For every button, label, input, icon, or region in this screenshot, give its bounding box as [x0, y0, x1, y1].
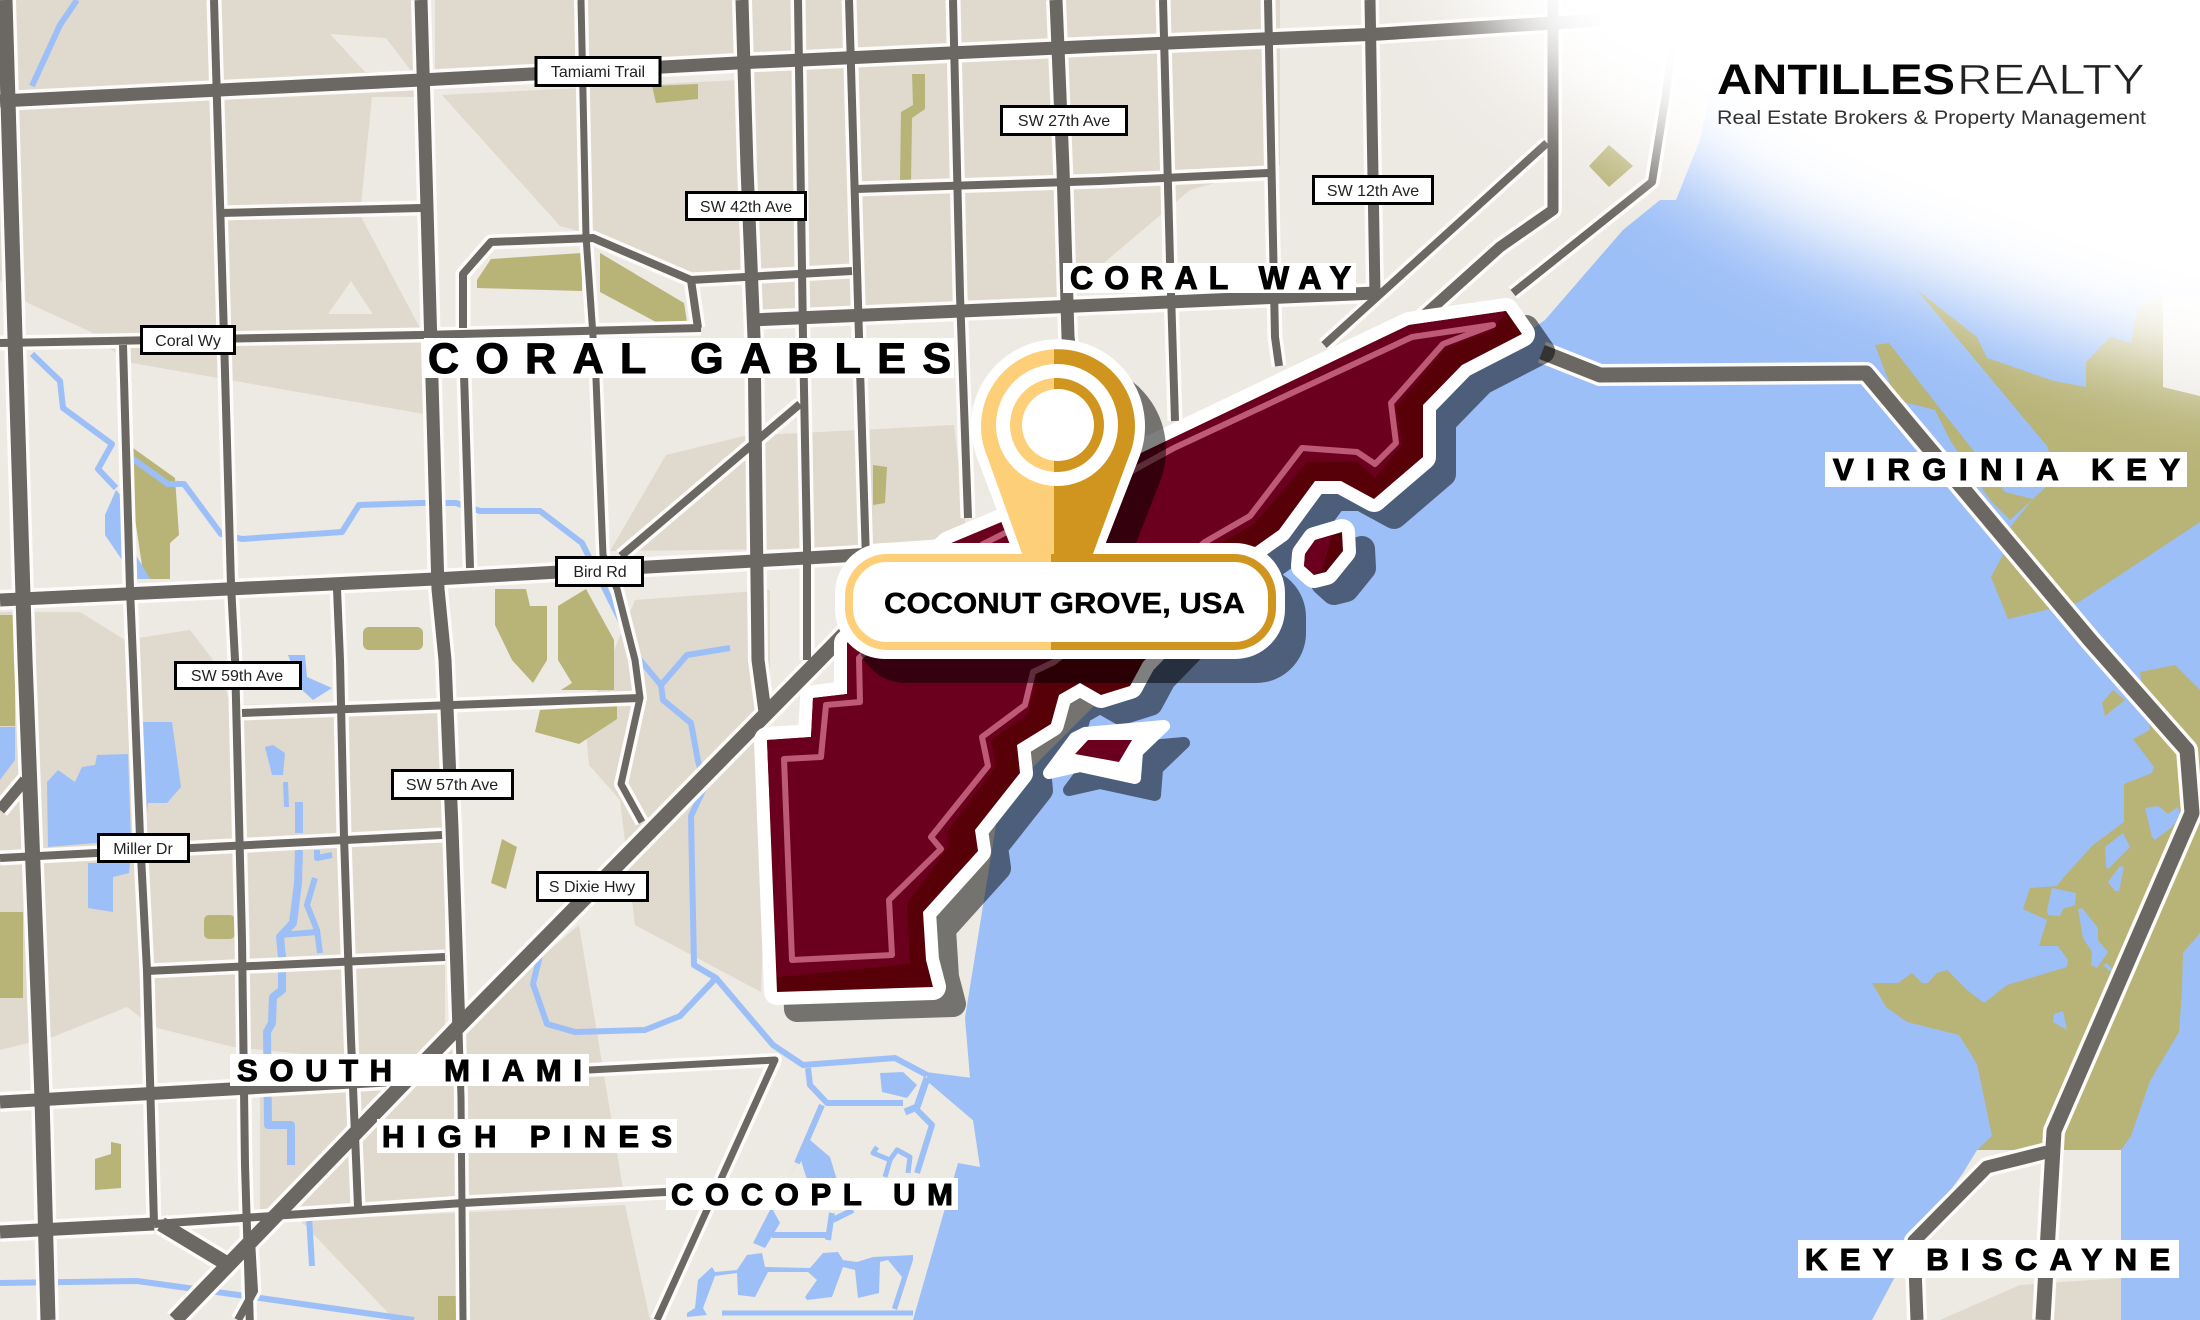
- pin white border: [981, 349, 1135, 556]
- road label: Coral Wy: [142, 326, 234, 354]
- place name: COCONUT GROVE, USA: [884, 588, 1245, 620]
- road label: S Dixie Hwy: [538, 872, 648, 900]
- district white outline: [767, 311, 1522, 992]
- neighborhood label: Cocoplum: COCOPL UM: [671, 1177, 953, 1212]
- road label: Tamiami Trail: Tamiami Trail: [551, 64, 645, 81]
- road label: Bird Rd: Bird Rd: [573, 564, 627, 581]
- pin white ring: [996, 364, 1118, 486]
- road label: SW 57th Ave: SW 57th Ave: [406, 777, 498, 794]
- parks: [0, 74, 1633, 1320]
- road label: SW 27th Ave: [1002, 106, 1126, 134]
- land: Key Biscayne: [1872, 1150, 2121, 1320]
- road label: SW 12th Ave: SW 12th Ave: [1327, 183, 1419, 200]
- neighborhood label: Coral Way: CORAL WAY: [1070, 260, 1351, 296]
- land: Virginia Key beach block: [2163, 295, 2200, 396]
- label gold outline left: [845, 554, 1051, 650]
- road label: Miller Dr: Miller Dr: [113, 841, 173, 858]
- map pin with place label: [835, 349, 1306, 683]
- label gold outline right: [1051, 554, 1276, 650]
- pin inner ring right: [1054, 378, 1104, 472]
- logo wordmark bold: ANTILLES: [1717, 56, 1955, 104]
- pin center hole: [1022, 389, 1094, 461]
- neighborhood label: Key Biscayne: KEY BISCAYNE: [1805, 1242, 2170, 1277]
- district shade band: [767, 311, 1522, 992]
- island: north: [1304, 532, 1343, 575]
- road label: SW 42th Ave: [686, 192, 806, 220]
- district: Coconut Grove: [767, 311, 1522, 992]
- fade: white vignette at top right: [1420, 0, 2200, 385]
- neighborhood label: Virginia Key: VIRGINIA KEY: [1833, 452, 2180, 487]
- pin gold body left: [981, 349, 1054, 554]
- parks: Virginia Key: [1875, 290, 2200, 619]
- neighborhood label: South Miami: SOUTH MIAMI: [237, 1053, 582, 1088]
- road label: Bird Rd: [556, 558, 642, 586]
- lakes: [0, 490, 2180, 1317]
- road label: Tamiami Trail: [536, 58, 660, 86]
- island: south: [1049, 726, 1164, 778]
- road label: Miller Dr: [98, 834, 188, 862]
- shadow: Coconut Grove district: [787, 328, 1542, 1009]
- neighborhood label: Coral Gables: CORAL GABLES: [428, 335, 951, 383]
- road label: SW 27th Ave: SW 27th Ave: [1018, 113, 1110, 130]
- logo wordmark light: REALTY: [1957, 56, 2145, 104]
- land: darker land-use patches: [0, 0, 1280, 1320]
- road label: SW 59th Ave: SW 59th Ave: [191, 668, 283, 685]
- label white border: [835, 543, 1285, 659]
- district inner pink line: [784, 325, 1493, 960]
- road label: SW 12th Ave: [1314, 176, 1432, 204]
- logo tagline: Real Estate Brokers & Property Management: [1717, 108, 2147, 129]
- land: mainland: [0, 0, 1730, 1320]
- pin gold body right: [1054, 349, 1135, 554]
- pin inner ring left: [1010, 378, 1054, 472]
- canals: [0, 0, 932, 1320]
- district main fill: [767, 311, 1506, 977]
- logo: Antilles Realty: [1717, 56, 2147, 129]
- road label: SW 42th Ave: SW 42th Ave: [700, 199, 792, 216]
- pin shadow: [856, 373, 1306, 683]
- road label: SW 59th Ave: [176, 662, 300, 688]
- neighborhood label: High Pines: HIGH PINES: [382, 1119, 672, 1154]
- road label: S Dixie Hwy: S Dixie Hwy: [549, 879, 635, 896]
- parks: Key Biscayne north: [1872, 665, 2200, 1150]
- road label: SW 57th Ave: [392, 770, 512, 798]
- road label: Coral Wy: Coral Wy: [155, 333, 221, 350]
